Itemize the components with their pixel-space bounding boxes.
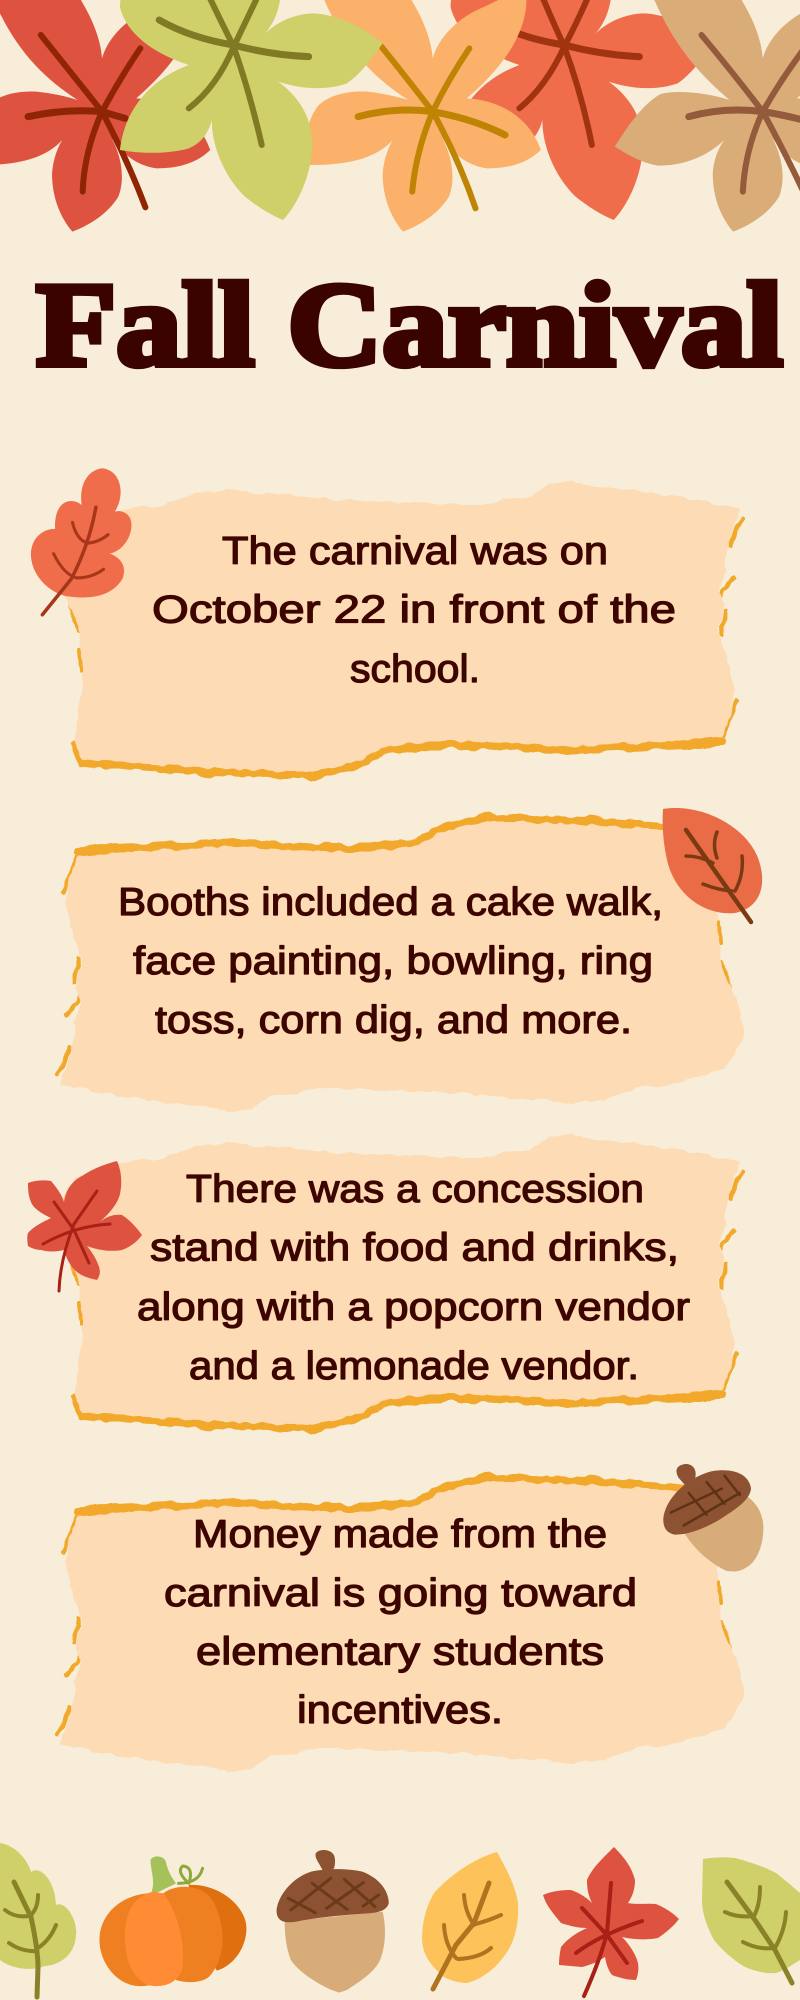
text: money raised: carnival is going toward (164, 1572, 637, 1615)
torn paper card (55, 1134, 743, 1429)
title: Fall Carnival (36, 258, 783, 391)
icon: orange leaf (663, 808, 762, 922)
leaf: green (120, 0, 383, 220)
top leaf border (0, 0, 800, 232)
text: concessions: and a lemonade vendor. (189, 1345, 639, 1388)
text: carnival date: The carnival was on (222, 530, 608, 573)
text: concessions: There was a concession (186, 1168, 644, 1211)
text: carnival date: October 22 in front of the (152, 588, 676, 632)
leaf: light orange (306, 0, 541, 232)
leaf: deep orange (451, 0, 713, 220)
text: concessions: along with a popcorn vendor (137, 1286, 690, 1329)
text: booths: toss, corn dig, and more. (155, 999, 632, 1042)
icon: red maple leaf (27, 1161, 142, 1291)
icon: yellow leaf (422, 1852, 518, 1989)
torn paper card (57, 1477, 745, 1772)
bottom icon row (0, 1843, 800, 1997)
leaf: red (0, 0, 210, 232)
text: money raised (164, 1513, 637, 1732)
panel: concessions (27, 1134, 743, 1429)
text: booths: Booths included a cake walk, (118, 881, 663, 924)
text: concessions (137, 1168, 690, 1388)
panel: carnival date (31, 468, 743, 776)
text: carnival date: school. (350, 648, 480, 691)
text: concessions: stand with food and drinks, (150, 1226, 679, 1270)
text: money raised: elementary students (196, 1630, 604, 1674)
leaf: tan (615, 0, 800, 232)
icon: green leaf (702, 1857, 800, 1983)
icon: oak leaf (31, 468, 131, 615)
panel: booths (57, 808, 762, 1112)
icon: acorn (277, 1850, 389, 1993)
text: booths: face painting, bowling, ring (133, 940, 653, 983)
icon: pumpkin (99, 1856, 246, 1986)
icon: green oak leaf (0, 1843, 76, 1997)
text: money raised: incentives. (297, 1689, 503, 1732)
icon: acorn (663, 1464, 763, 1571)
torn paper card (55, 481, 743, 776)
icon: red maple leaf (543, 1847, 679, 1996)
panel: money raised (57, 1464, 763, 1772)
text: money raised: Money made from the (193, 1513, 607, 1556)
text: carnival date (152, 530, 676, 691)
torn paper card (57, 817, 745, 1112)
text: booths (118, 881, 663, 1042)
